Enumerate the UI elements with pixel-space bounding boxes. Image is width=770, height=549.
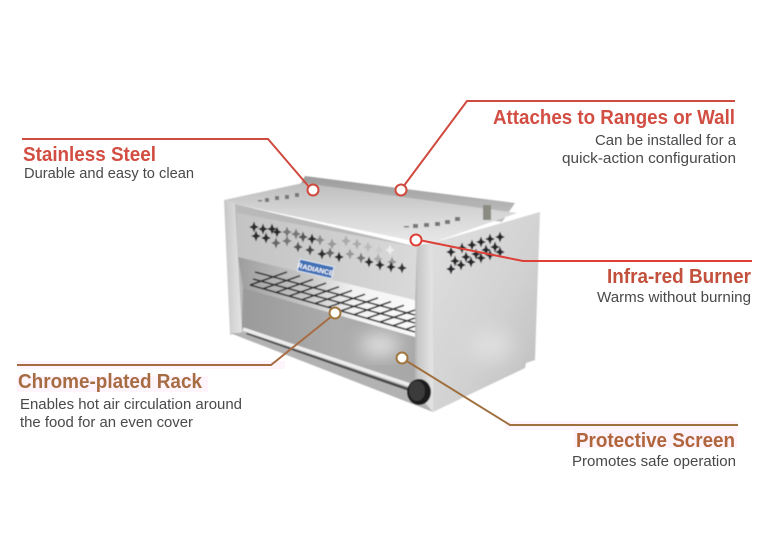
callout: chrome-plated rack: Chrome-plated Rack <box>18 371 203 393</box>
marker: screen <box>396 352 408 364</box>
marker: rack <box>330 308 340 318</box>
callout: attaches to ranges or wall <box>396 101 737 196</box>
front vent stars <box>249 222 407 274</box>
bottom lip <box>230 333 433 412</box>
top plate <box>224 183 517 243</box>
side vent stars <box>446 232 505 274</box>
screen glow <box>360 335 400 355</box>
callout: chrome-plated rack: Enables hot air circulation around <box>20 397 242 413</box>
side panel sheen <box>468 329 512 361</box>
marker: attaches <box>396 184 406 196</box>
bottom tube <box>243 329 410 385</box>
top plate vents <box>258 193 460 228</box>
marker: infra-red <box>410 234 422 246</box>
side panel <box>432 212 540 412</box>
callout: attaches to ranges or wall: Attaches to Ranges or Wall <box>493 107 735 129</box>
left post <box>224 200 242 335</box>
upper front panel <box>237 213 417 300</box>
lower heat screen <box>242 288 415 388</box>
control knob <box>407 379 431 405</box>
callout: attaches to ranges or wall: quick-action configuration <box>562 151 736 167</box>
callout: attaches to ranges or wall: Can be installed for a <box>595 133 737 149</box>
callout: protective screen: Promotes safe operation <box>572 454 736 470</box>
callout: infra-red burner: Infra-red Burner <box>607 266 751 288</box>
front right post <box>417 243 433 412</box>
marker: stainless steel <box>308 184 318 196</box>
callout: protective screen: Protective Screen <box>576 430 735 452</box>
rear flue panel <box>296 176 515 222</box>
cooking opening <box>238 257 415 337</box>
callout: chrome-plated rack: the food for an even cover <box>20 415 193 431</box>
callout: infra-red burner <box>410 234 752 306</box>
callout: stainless steel <box>22 139 318 196</box>
callout: protective screen <box>396 352 738 470</box>
callout: chrome-plated rack <box>17 308 340 431</box>
callout: infra-red burner: Warms without burning <box>597 290 751 306</box>
callout: stainless steel: Durable and easy to clean <box>24 166 194 182</box>
front frame <box>230 204 418 393</box>
brand badge: RADIANCE <box>297 263 334 278</box>
product photo: cheesemelter <box>224 176 540 412</box>
gas fitting <box>483 205 491 220</box>
callout: stainless steel: Stainless Steel <box>23 144 156 166</box>
rack <box>250 272 415 332</box>
